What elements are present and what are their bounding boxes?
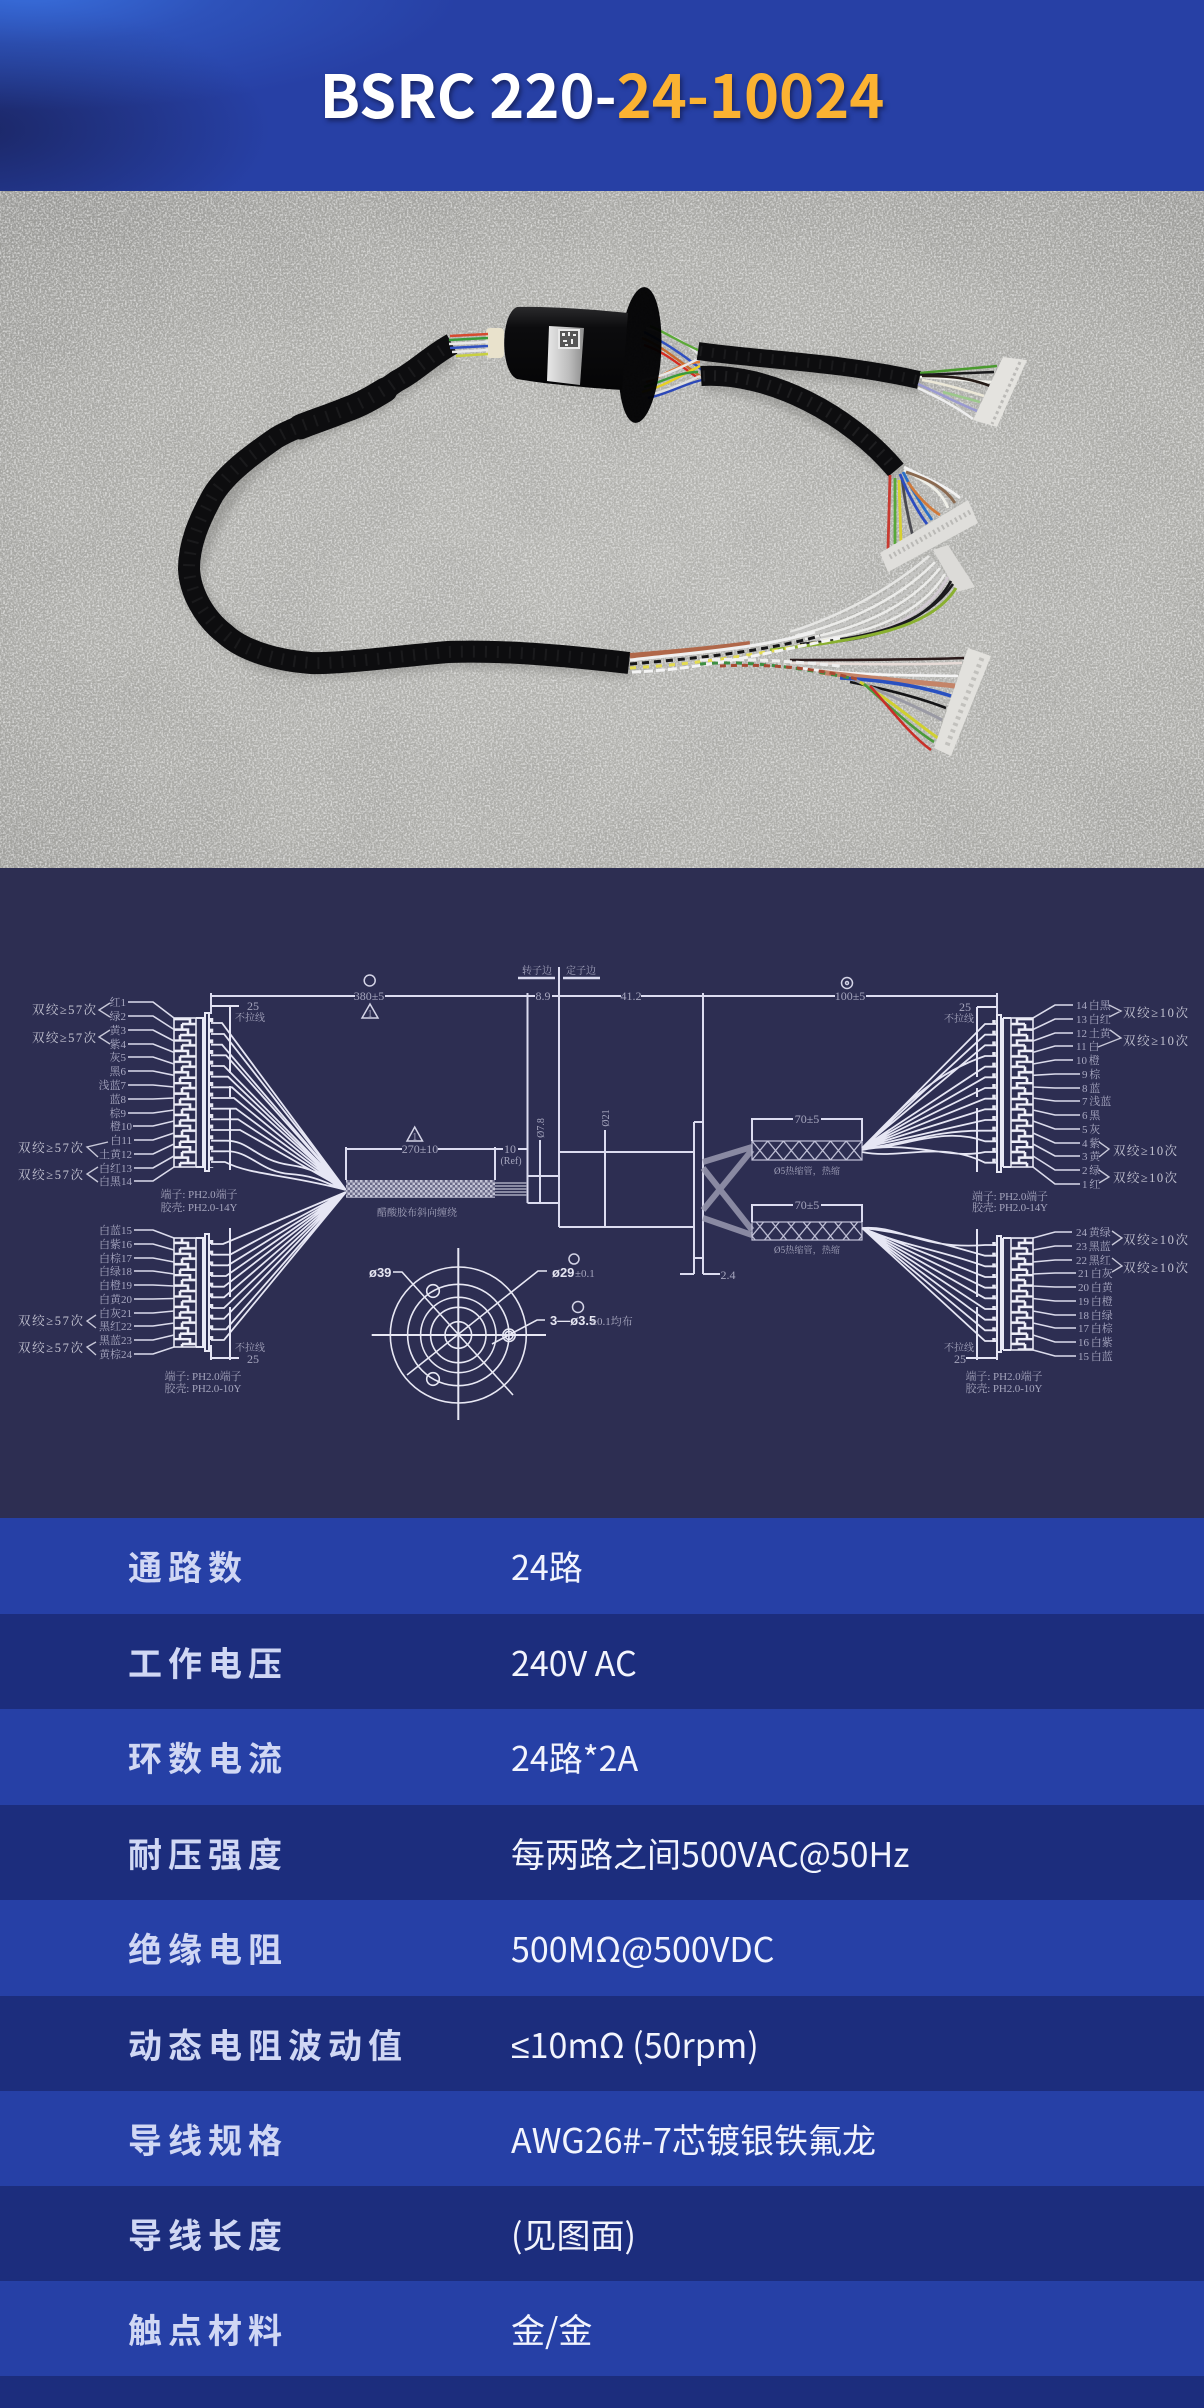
silver label bbox=[547, 326, 584, 385]
stator heat shrink sleeves: 70±5 bbox=[795, 1198, 819, 1212]
wire labels 24 to 15: 22 黑红 bbox=[1076, 1254, 1111, 1267]
wire labels 1 to 14: 白11 bbox=[110, 1134, 132, 1147]
connector 3 with wires bbox=[770, 545, 975, 650]
top dimension labels bbox=[354, 964, 865, 1003]
upper branch cable bbox=[698, 351, 919, 380]
twist notes right: 双绞≥10次 bbox=[1123, 1033, 1188, 1048]
spec row: contact material bbox=[0, 2281, 1204, 2376]
value: 金/金 bbox=[511, 2304, 592, 2353]
twist notes left: 双绞≥57次 bbox=[18, 1140, 83, 1155]
wire labels 1 to 14: 白黑14 bbox=[99, 1175, 132, 1188]
wire labels 24 to 15: 24 黄绿 bbox=[1076, 1225, 1111, 1239]
wire labels 14 to 1 bbox=[1076, 999, 1112, 1191]
side view dimension labels: 2.4 bbox=[720, 1268, 736, 1282]
twist notes left: 双绞≥57次 bbox=[18, 1313, 83, 1328]
sleeved cable with dimension: 醋酸胶布斜向缠绕 bbox=[377, 1206, 457, 1219]
rotor side collar and wires bbox=[449, 328, 504, 358]
term text top-right bbox=[944, 1000, 1048, 1214]
wire labels 1 to 14: 棕9 bbox=[110, 1106, 126, 1120]
wire labels 14 to 1: 13 白红 bbox=[1076, 1013, 1111, 1026]
wire labels 15 to 24: 白黄20 bbox=[99, 1292, 132, 1306]
side view dimension labels: Ø7.8 bbox=[536, 1118, 547, 1138]
QR code bbox=[558, 329, 580, 349]
grey textured background bbox=[0, 191, 1204, 868]
stator heat shrink sleeves bbox=[752, 1112, 862, 1256]
label: 耐压强度 bbox=[128, 1828, 288, 1876]
twist notes right: 双绞≥10次 bbox=[1113, 1170, 1177, 1185]
twist notes left: 双绞≥57次 bbox=[18, 1167, 83, 1182]
connector lower-right 10-way bbox=[966, 1229, 1033, 1360]
wire labels 1 to 14: 红1 bbox=[110, 996, 126, 1009]
term text lower-right: 不拉线 bbox=[944, 1341, 974, 1354]
term text lower-left: 胶壳: PH2.0-10Y bbox=[164, 1381, 242, 1395]
wire labels 14 to 1: 3 黄 bbox=[1082, 1149, 1101, 1163]
wire labels 1 to 14: 白红13 bbox=[99, 1162, 132, 1175]
product photo bbox=[0, 191, 1204, 868]
wire fan top-right bbox=[862, 1024, 998, 1163]
label: 触点材料 bbox=[128, 2304, 288, 2353]
wire labels 15 to 24: 白紫16 bbox=[99, 1237, 132, 1251]
spec row: wire spec bbox=[0, 2091, 1204, 2187]
top dimension labels: 100±5 bbox=[835, 989, 865, 1003]
wire labels 1 to 14: 绿2 bbox=[110, 1010, 126, 1023]
twist notes left: 双绞≥57次 bbox=[32, 1002, 96, 1017]
crossing wire bundles bbox=[703, 1147, 752, 1235]
value: 每两路之间500VAC@50Hz bbox=[511, 1828, 909, 1876]
flange dimension labels: 3—ø3.5 bbox=[550, 1313, 596, 1328]
label: 导线规格 bbox=[128, 2114, 288, 2163]
side view dimension labels: Ø21 bbox=[601, 1109, 612, 1127]
value: (见图面) bbox=[511, 2209, 636, 2258]
twist notes right bbox=[1098, 1005, 1188, 1275]
wire labels 15 to 24: 白灰21 bbox=[99, 1307, 132, 1320]
term text top-right: 端子: PH2.0端子 bbox=[972, 1189, 1048, 1203]
warning numbers: 1 bbox=[368, 1009, 372, 1020]
label: 导线长度 bbox=[128, 2209, 288, 2258]
wire labels 1 to 14 bbox=[98, 996, 132, 1188]
wire labels 15 to 24: 白棕17 bbox=[99, 1251, 132, 1265]
leader lines lower-left bbox=[134, 1230, 174, 1354]
wire labels 14 to 1: 8 蓝 bbox=[1082, 1081, 1100, 1095]
connector top-right 14-way bbox=[977, 1007, 1033, 1172]
connector top-left 14-way bbox=[174, 1005, 239, 1171]
wire labels 1 to 14: 紫4 bbox=[110, 1037, 126, 1051]
sleeved cable with dimension: 10 bbox=[504, 1142, 516, 1156]
slip ring side view bbox=[528, 1122, 720, 1274]
wire labels 14 to 1: 6 黑 bbox=[1082, 1109, 1101, 1122]
wire labels 15 to 24: 黑蓝23 bbox=[99, 1333, 132, 1347]
spec row: working voltage bbox=[0, 1614, 1204, 1710]
term text top-right: 不拉线 bbox=[944, 1012, 974, 1025]
value: 24路 bbox=[511, 1541, 583, 1590]
term text top-left: 胶壳: PH2.0-14Y bbox=[160, 1200, 238, 1214]
flange dimension labels: ±0.1 bbox=[575, 1268, 595, 1280]
flange end view bbox=[372, 1248, 547, 1420]
twist notes right: 双绞≥10次 bbox=[1113, 1143, 1177, 1158]
wire labels 24 to 15: 15 白蓝 bbox=[1078, 1349, 1113, 1363]
term text top-left: 不拉线 bbox=[235, 1011, 265, 1024]
wire labels 15 to 24 bbox=[99, 1223, 132, 1361]
warning numbers: 1 bbox=[412, 1132, 417, 1143]
warning numbers bbox=[368, 1009, 417, 1143]
label: 环数电流 bbox=[128, 1732, 288, 1781]
leader lines top-left bbox=[128, 1002, 174, 1181]
flange bbox=[614, 286, 666, 424]
stator heat shrink sleeves: Ø5热缩管，热缩 bbox=[774, 1165, 840, 1177]
term text top-left: 25 bbox=[247, 999, 259, 1013]
wire labels 1 to 14: 土黄12 bbox=[99, 1147, 132, 1161]
wire labels 15 to 24: 白橙19 bbox=[99, 1278, 132, 1292]
wire labels 24 to 15: 23 黑蓝 bbox=[1076, 1239, 1111, 1253]
connector 1 with wires bbox=[918, 357, 1027, 427]
spec row: channels bbox=[0, 1518, 1204, 1614]
connector lower-left 10-way bbox=[174, 1228, 239, 1360]
wire labels 24 to 15: 20 白黄 bbox=[1078, 1280, 1114, 1294]
term text lower-right: 端子: PH2.0端子 bbox=[966, 1369, 1042, 1383]
twist notes left bbox=[18, 1002, 110, 1355]
twist notes right: 双绞≥10次 bbox=[1123, 1005, 1188, 1020]
wire labels 15 to 24: 白绿18 bbox=[99, 1265, 132, 1278]
title: BSRC 220-24-10024 bbox=[320, 50, 884, 136]
stator heat shrink sleeves: 70±5 bbox=[795, 1112, 819, 1126]
wire labels 15 to 24: 黄棕24 bbox=[99, 1347, 132, 1361]
wire labels 24 to 15: 18 白绿 bbox=[1078, 1309, 1113, 1322]
wire labels 14 to 1: 10 橙 bbox=[1076, 1053, 1100, 1067]
sleeved cable with dimension: 270±10 bbox=[402, 1142, 438, 1156]
wire labels 1 to 14: 灰5 bbox=[110, 1051, 126, 1064]
side view dimension labels bbox=[536, 1109, 736, 1282]
wire fan lower-left bbox=[211, 1192, 346, 1340]
leader lines top-right bbox=[1033, 1005, 1080, 1184]
value: AWG26#-7芯镀银铁氟龙 bbox=[511, 2114, 876, 2163]
term text lower-left: 端子: PH2.0端子 bbox=[164, 1369, 242, 1383]
top dimension labels: 8.9 bbox=[536, 989, 550, 1003]
wire labels 14 to 1: 9 棕 bbox=[1082, 1067, 1101, 1081]
term text top-left: 端子: PH2.0端子 bbox=[160, 1187, 238, 1201]
wire labels 14 to 1: 5 灰 bbox=[1082, 1123, 1100, 1136]
top dimension lines bbox=[211, 967, 997, 1227]
sleeved cable with dimension bbox=[346, 1142, 527, 1219]
lower branch cable bbox=[701, 376, 896, 470]
wire labels 1 to 14: 橙10 bbox=[110, 1119, 132, 1133]
value: 240V AC bbox=[511, 1637, 637, 1686]
label: 工作电压 bbox=[128, 1637, 288, 1686]
flange dimension labels: ø39 bbox=[369, 1265, 391, 1280]
flange dimension labels bbox=[369, 1265, 633, 1328]
wire labels 1 to 14: 黑6 bbox=[110, 1065, 126, 1078]
slip ring body with label bbox=[504, 307, 628, 390]
spec row: insulation resistance bbox=[0, 1900, 1204, 1996]
wire labels 14 to 1: 7 浅蓝 bbox=[1082, 1094, 1111, 1108]
term text lower-left bbox=[164, 1341, 265, 1395]
stator heat shrink sleeves: Ø5热缩管，热缩 bbox=[774, 1244, 840, 1256]
twist notes left: 双绞≥57次 bbox=[18, 1340, 83, 1355]
term text top-right: 25 bbox=[959, 1000, 971, 1014]
wire labels 1 to 14: 黄3 bbox=[110, 1023, 126, 1037]
wire labels 14 to 1: 1 红 bbox=[1082, 1178, 1100, 1191]
wire labels 15 to 24: 黑红22 bbox=[99, 1320, 132, 1333]
cable shadows bbox=[192, 353, 922, 668]
twisted wire section bbox=[630, 632, 860, 680]
term text top-right: 胶壳: PH2.0-14Y bbox=[972, 1200, 1048, 1214]
top dimension labels: 41.2 bbox=[620, 989, 642, 1003]
wire fan top-left bbox=[211, 1023, 346, 1190]
wire labels 14 to 1: 2 绿 bbox=[1082, 1164, 1100, 1177]
value: ≤10mΩ (50rpm) bbox=[511, 2018, 759, 2068]
wire labels 24 to 15 bbox=[1076, 1225, 1114, 1363]
connector 2 with wires bbox=[880, 467, 978, 572]
wire labels 24 to 15: 17 白棕 bbox=[1078, 1321, 1114, 1335]
term text lower-left: 25 bbox=[247, 1352, 259, 1366]
sleeved cable with dimension: (Ref) bbox=[500, 1156, 522, 1167]
value: 500MΩ@500VDC bbox=[511, 1923, 774, 1972]
main black sleeved cable bbox=[189, 344, 629, 663]
flange dimension labels: ø29 bbox=[552, 1265, 574, 1280]
twist notes right: 双绞≥10次 bbox=[1123, 1260, 1188, 1275]
wire fan lower-right bbox=[862, 1228, 998, 1341]
term text lower-right: 25 bbox=[954, 1352, 966, 1366]
stator side wires out of flange bbox=[642, 326, 702, 398]
twist notes left: 双绞≥57次 bbox=[32, 1030, 96, 1045]
wire labels 15 to 24: 白蓝15 bbox=[99, 1223, 132, 1237]
label: 绝缘电阻 bbox=[128, 1923, 288, 1972]
value: 24路*2A bbox=[511, 1732, 638, 1781]
technical drawing panel bbox=[0, 868, 1204, 1518]
term text lower-right bbox=[944, 1341, 1043, 1395]
wire labels 1 to 14: 浅蓝7 bbox=[98, 1078, 126, 1092]
flange dimension labels: ±0.1均布 bbox=[591, 1314, 633, 1328]
spec row: dynamic resistance bbox=[0, 1996, 1204, 2092]
term text top-left bbox=[160, 999, 265, 1214]
wire labels 24 to 15: 16 白紫 bbox=[1078, 1335, 1113, 1349]
wire labels 24 to 15: 21 白灰 bbox=[1078, 1267, 1113, 1280]
connector 4 with wires bbox=[790, 648, 991, 756]
twist notes right: 双绞≥10次 bbox=[1123, 1232, 1188, 1247]
wire labels 14 to 1: 12 土黄 bbox=[1076, 1026, 1112, 1040]
top dimension labels: 380±5 bbox=[354, 989, 384, 1003]
term text lower-right: 胶壳: PH2.0-10Y bbox=[966, 1381, 1043, 1395]
wire labels 14 to 1: 14 白黑 bbox=[1076, 999, 1112, 1012]
wire labels 24 to 15: 19 白橙 bbox=[1078, 1294, 1113, 1308]
label: 通路数 bbox=[128, 1541, 248, 1590]
wire labels 1 to 14: 蓝8 bbox=[110, 1092, 126, 1106]
leader lines lower-right bbox=[1033, 1232, 1076, 1356]
callout symbols bbox=[362, 975, 852, 1312]
spec row: dielectric strength bbox=[0, 1804, 1204, 1900]
top dimension labels: 定子边 bbox=[566, 964, 596, 977]
label: 动态电阻波动值 bbox=[128, 2018, 408, 2068]
spec row: wire length bbox=[0, 2186, 1204, 2282]
spec row: ring current bbox=[0, 1709, 1204, 1805]
wire labels 14 to 1: 11 白 bbox=[1076, 1040, 1099, 1053]
top dimension labels: 转子边 bbox=[522, 964, 552, 977]
header banner bbox=[0, 0, 1204, 191]
term text lower-left: 不拉线 bbox=[235, 1341, 265, 1354]
wire labels 14 to 1: 4 紫 bbox=[1082, 1136, 1100, 1150]
